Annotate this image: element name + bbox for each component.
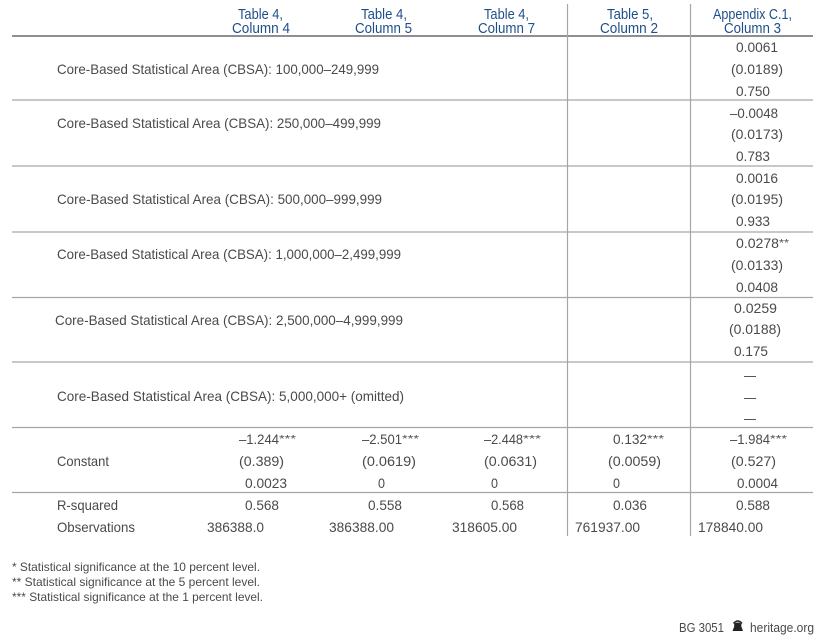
appendix column: CBSA coefficients: –0.0048	[730, 105, 778, 121]
constant row: (0.0631)	[484, 453, 537, 469]
row labels: CBSA size categories: Core-Based Statistical Area (CBSA): 500,000–999,999	[57, 191, 382, 207]
constant row: (0.0059)	[608, 453, 661, 469]
R-squared row: 0.558	[368, 497, 402, 513]
appendix column: CBSA coefficients: (0.0133)	[731, 257, 783, 273]
header: column titles	[232, 7, 792, 37]
observations row	[57, 519, 763, 535]
observations row: 386388.00	[329, 519, 394, 535]
constant row: (0.389)	[239, 453, 284, 469]
appendix column: CBSA coefficients: 0.0061	[736, 39, 778, 55]
appendix column: CBSA coefficients: 0.750	[736, 83, 770, 99]
appendix column: CBSA coefficients	[729, 39, 789, 426]
header: column titles: Column 7	[478, 21, 535, 37]
R-squared row: 0.568	[491, 497, 524, 513]
R-squared row: 0.588	[736, 497, 770, 513]
constant row: –2.448	[484, 431, 523, 447]
appendix column: CBSA coefficients: —	[744, 389, 756, 405]
constant row: 0	[378, 475, 385, 491]
header: column titles: Table 5,	[607, 7, 653, 23]
row labels: CBSA size categories: Core-Based Statistical Area (CBSA): 250,000–499,999	[57, 115, 381, 131]
row labels: CBSA size categories: Core-Based Statistical Area (CBSA): 1,000,000–2,499,999	[57, 246, 401, 262]
constant row: 0	[613, 475, 620, 491]
constant row: 0.0004	[737, 475, 778, 491]
constant row: ***	[647, 434, 664, 445]
constant row: ***	[770, 434, 787, 445]
constant row: ***	[402, 434, 419, 445]
icon: liberty bell	[732, 621, 743, 631]
appendix column: CBSA coefficients: (0.0188)	[729, 321, 781, 337]
header: column titles: Table 4,	[238, 7, 283, 23]
constant row: Constant	[57, 453, 109, 469]
footnotes	[12, 560, 263, 604]
appendix column: CBSA coefficients: —	[744, 367, 756, 383]
R-squared row	[57, 497, 770, 513]
appendix column: CBSA coefficients: (0.0189)	[731, 61, 783, 77]
appendix column: CBSA coefficients: 0.933	[736, 213, 770, 229]
constant row: –1.984	[730, 431, 770, 447]
observations row: 318605.00	[452, 519, 517, 535]
R-squared row: R-squared	[57, 497, 118, 513]
header: column titles: Column 2	[600, 21, 658, 37]
R-squared row: 0.568	[245, 497, 279, 513]
appendix column: CBSA coefficients: 0.0278	[736, 235, 779, 251]
row labels: CBSA size categories	[55, 61, 404, 404]
constant row: (0.527)	[731, 453, 776, 469]
footnotes: ** Statistical significance at the 5 percent level.	[12, 575, 260, 589]
appendix column: CBSA coefficients: **	[779, 238, 789, 249]
footnotes: * Statistical significance at the 10 percent level.	[12, 560, 260, 574]
constant row: –1.244	[239, 431, 279, 447]
observations row: 761937.00	[575, 519, 640, 535]
row labels: CBSA size categories: Core-Based Statistical Area (CBSA): 5,000,000+ (omitted)	[57, 388, 404, 404]
appendix column: CBSA coefficients: (0.0173)	[731, 126, 783, 142]
constant row: (0.0619)	[362, 453, 416, 469]
header: column titles: Column 5	[355, 21, 412, 37]
footnotes: *** Statistical significance at the 1 percent level.	[12, 590, 263, 604]
constant row: ***	[523, 434, 541, 445]
appendix column: CBSA coefficients: 0.175	[734, 343, 768, 359]
constant row	[57, 431, 787, 491]
row labels: CBSA size categories: Core-Based Statistical Area (CBSA): 100,000–249,999	[57, 61, 379, 77]
header: column titles: Column 4	[232, 21, 290, 37]
constant row: 0.132	[613, 431, 647, 447]
appendix column: CBSA coefficients: 0.783	[736, 148, 770, 164]
website: heritage.org	[750, 620, 814, 635]
observations row: 386388.0	[207, 519, 264, 535]
appendix column: CBSA coefficients: 0.0259	[734, 300, 777, 316]
observations row: 178840.00	[698, 519, 763, 535]
appendix column: CBSA coefficients: 0.0408	[736, 279, 778, 295]
appendix column: CBSA coefficients: —	[744, 410, 756, 426]
header: column titles: Table 4,	[484, 7, 529, 23]
appendix column: CBSA coefficients: 0.0016	[736, 170, 778, 186]
appendix column: CBSA coefficients: (0.0195)	[731, 191, 783, 207]
header: column titles: Column 3	[724, 21, 781, 37]
source code: BG 3051	[679, 620, 724, 635]
constant row: 0	[491, 475, 498, 491]
constant row: 0.0023	[245, 475, 287, 491]
constant row: ***	[279, 434, 296, 445]
R-squared row: 0.036	[613, 497, 647, 513]
row labels: CBSA size categories: Core-Based Statistical Area (CBSA): 2,500,000–4,999,999	[55, 312, 403, 328]
constant row: –2.501	[362, 431, 402, 447]
header: column titles: Appendix C.1,	[713, 7, 792, 23]
observations row: Observations	[57, 519, 135, 535]
header: column titles: Table 4,	[361, 7, 407, 23]
